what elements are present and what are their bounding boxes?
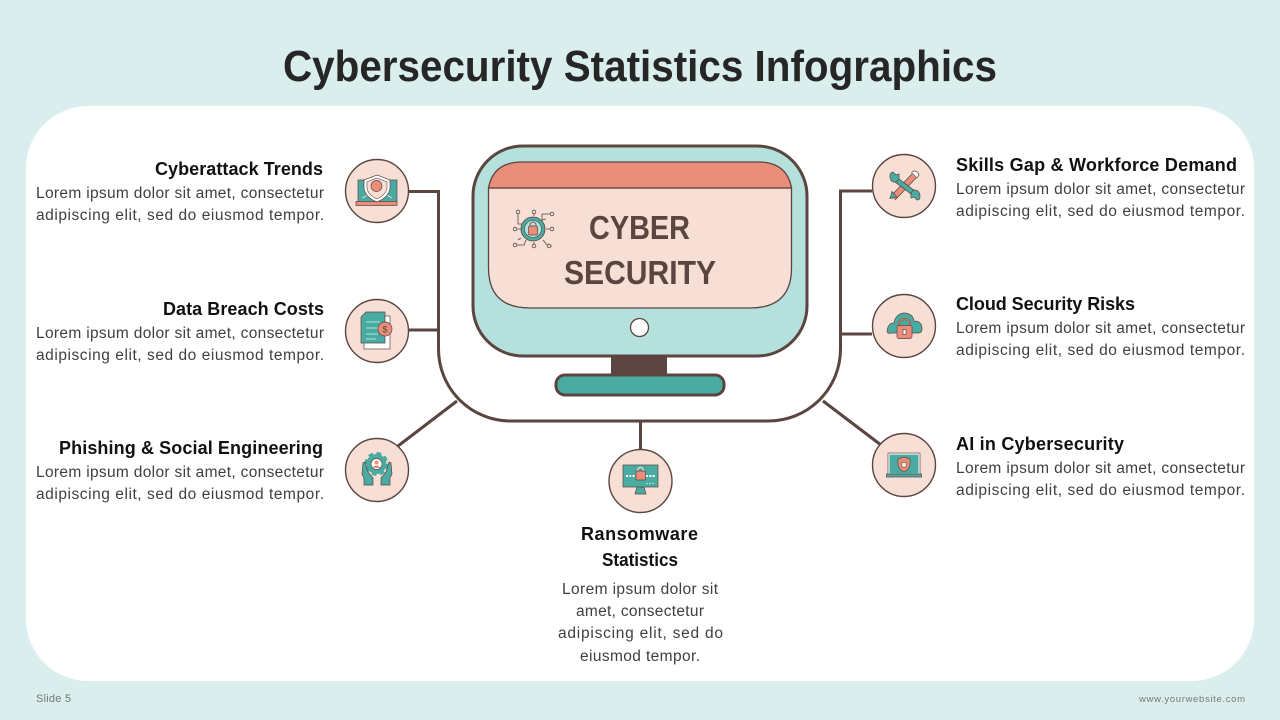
icon: circuit lock: [513, 210, 554, 248]
text: Cyberattack Trends: Lorem ipsum dolor sit amet, consectetur: [36, 185, 324, 202]
node: Ransomware Statistics: [558, 450, 723, 665]
text: Skills Gap & Workforce Demand: Skills Gap & Workforce Demand: [956, 155, 1237, 175]
text: AI in Cybersecurity: [956, 434, 1245, 499]
title: Cybersecurity Statistics Infographics: [283, 42, 997, 91]
connector lines: [398, 191, 881, 450]
screen text: CYBER: [589, 209, 690, 246]
text: Data Breach Costs: adipiscing elit, sed do eiusmod tempor.: [36, 347, 324, 364]
text: Phishing & Social Engineering: Lorem ipsum dolor sit amet, consectetur: [36, 464, 324, 481]
monitor body: [473, 146, 807, 356]
text: Cyberattack Trends: Cyberattack Trends: [155, 159, 323, 179]
text: Cyberattack Trends: adipiscing elit, sed do eiusmod tempor.: [36, 207, 324, 224]
text: Data Breach Costs: [36, 299, 324, 364]
text: Ransomware Statistics: eiusmod tempor.: [580, 648, 700, 665]
text: Ransomware Statistics: [558, 524, 723, 665]
screen header bar: [488, 162, 792, 188]
text: AI in Cybersecurity: adipiscing elit, sed do eiusmod tempor.: [956, 482, 1245, 499]
footer: slide number: Slide 5: [36, 693, 71, 705]
text: Ransomware Statistics: Lorem ipsum dolor sit: [562, 581, 719, 598]
text: AI in Cybersecurity: Lorem ipsum dolor sit amet, consectetur: [956, 460, 1245, 477]
node: Phishing & Social Engineering: [36, 438, 408, 503]
text: Cloud Security Risks: [956, 294, 1245, 359]
text: Ransomware Statistics: adipiscing elit, sed do: [558, 625, 723, 642]
icon: document with coin: [346, 300, 408, 362]
node: Cloud Security Risks: [872, 294, 1245, 359]
text: Skills Gap & Workforce Demand: adipiscing elit, sed do eiusmod tempor.: [956, 203, 1245, 220]
text: Phishing & Social Engineering: adipiscing elit, sed do eiusmod tempor.: [36, 486, 324, 503]
text: Skills Gap & Workforce Demand: Lorem ipsum dolor sit amet, consectetur: [956, 181, 1245, 198]
monitor screen: [488, 188, 792, 308]
screen text: [564, 209, 716, 291]
power button: [630, 318, 648, 336]
text: Data Breach Costs: Lorem ipsum dolor sit amet, consectetur: [36, 325, 324, 342]
monitor stand: [611, 355, 667, 376]
text: Phishing & Social Engineering: [36, 438, 324, 503]
icon: hands holding gear: [346, 438, 408, 502]
text: Cloud Security Risks: Cloud Security Risks: [956, 294, 1135, 314]
text: Ransomware Statistics: amet, consectetur: [576, 603, 704, 620]
text: Ransomware Statistics: Statistics: [602, 550, 678, 570]
icon: cloud with lock: [872, 294, 936, 358]
text: Skills Gap & Workforce Demand: [956, 155, 1245, 220]
text: AI in Cybersecurity: AI in Cybersecurity: [956, 434, 1124, 454]
footer: website: www.yourwebsite.com: [1138, 694, 1245, 705]
central monitor: [473, 146, 807, 395]
icon: wrench and pencil: [872, 154, 936, 218]
node: Skills Gap & Workforce Demand: [872, 154, 1245, 220]
text: Cyberattack Trends: [36, 159, 324, 224]
icon: laptop with shield: [872, 434, 936, 496]
text: Cloud Security Risks: adipiscing elit, sed do eiusmod tempor.: [956, 342, 1245, 359]
node: AI in Cybersecurity: [872, 434, 1245, 499]
text: Cloud Security Risks: Lorem ipsum dolor sit amet, consectetur: [956, 320, 1245, 337]
main white panel: [26, 106, 1254, 681]
node: Data Breach Costs: [36, 299, 408, 364]
screen text: SECURITY: [564, 254, 716, 291]
icon: locked monitor: [609, 450, 672, 512]
text: Phishing & Social Engineering: Phishing & Social Engineering: [59, 438, 323, 458]
text: Ransomware Statistics: Ransomware: [581, 524, 698, 544]
monitor base: [556, 375, 724, 395]
node: Cyberattack Trends: [36, 159, 408, 224]
icon: document with coin: $: [382, 324, 388, 334]
icon: shield on laptop: [346, 160, 408, 222]
text: Data Breach Costs: Data Breach Costs: [163, 299, 324, 319]
